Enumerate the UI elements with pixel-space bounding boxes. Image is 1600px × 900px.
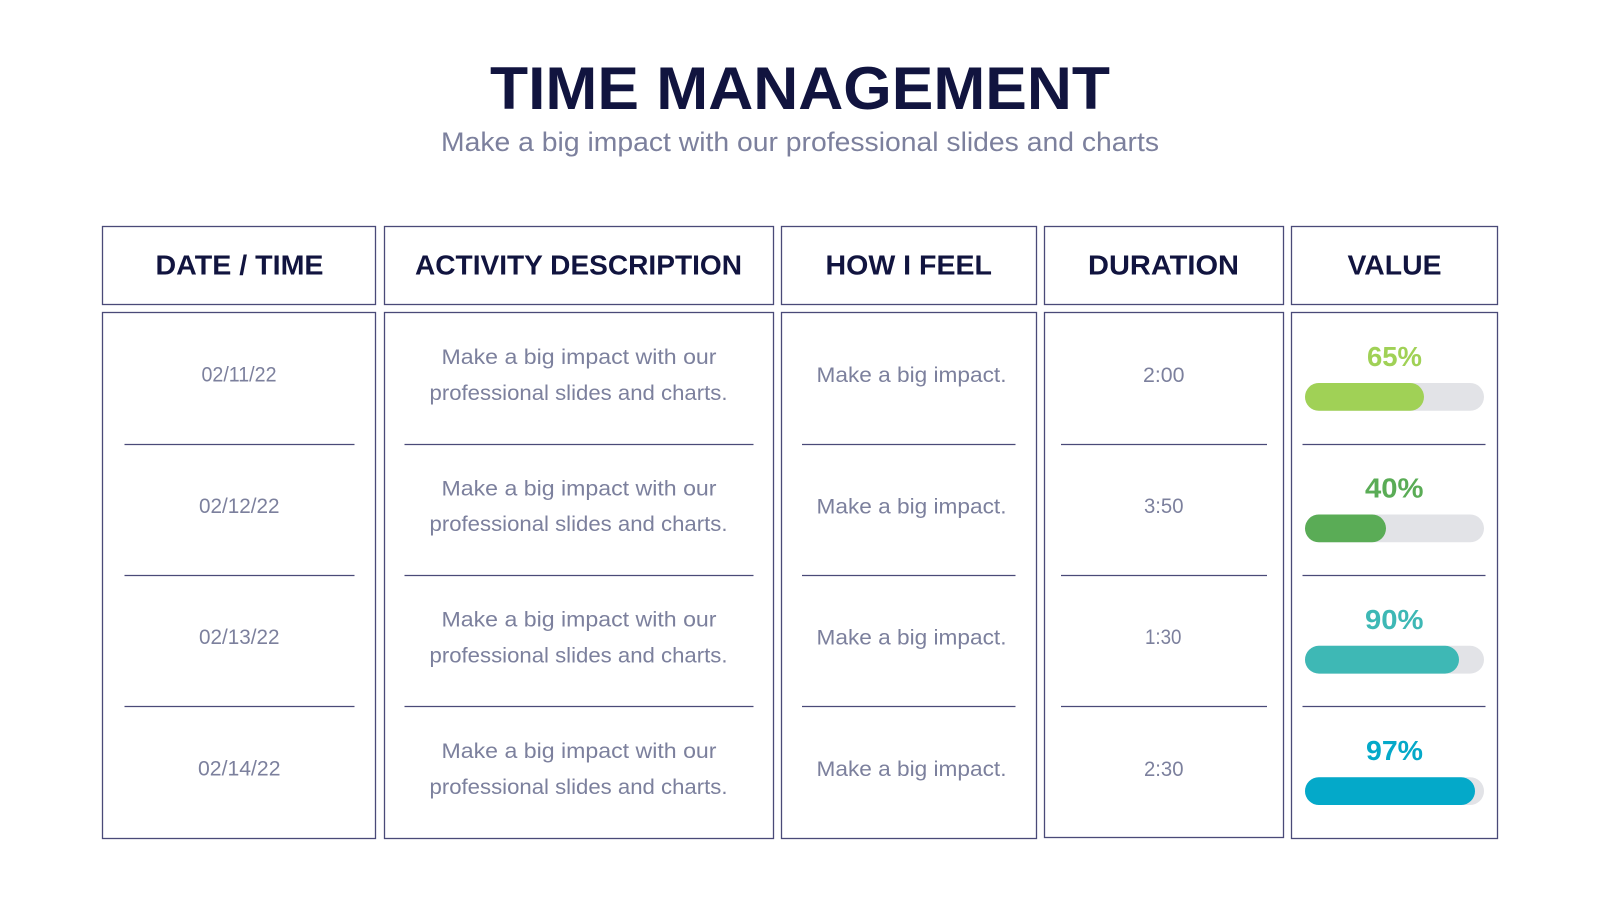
panel: dates: 02/12/22 [199,494,280,518]
column: duration [1044,226,1284,838]
panel: activities [384,312,774,838]
header: date / time [102,226,376,304]
panel: dates: 02/13/22 [199,625,280,649]
progress bar: 97%: 97% [1366,735,1423,766]
panel: activities: professional slides and charts. [430,512,728,536]
panel: durations [1044,312,1284,838]
progress bar: 40%: 40% [1365,472,1424,504]
panel: durations: 1:30 [1145,625,1182,649]
panel: activities: professional slides and charts. [430,381,728,405]
panel: dates [102,312,376,838]
header: how i feel [782,226,1036,304]
header: activity description: ACTIVITY DESCRIPTION [415,250,742,280]
panel: activities: Make a big impact with our [442,739,716,763]
subtitle: Make a big impact with our professional slides and charts [441,127,1159,157]
progress bar: 65% [1305,341,1484,411]
column: value [1292,226,1498,838]
panel: durations: 2:00 [1143,363,1185,387]
header: date / time: DATE / TIME [156,250,324,280]
progress bar: 40% [1305,472,1484,542]
column: date / time [102,226,376,838]
panel: activities: professional slides and charts. [430,644,728,668]
header: duration [1044,226,1284,304]
header: value [1292,226,1498,304]
panel: feelings [782,312,1036,838]
panel: feelings: Make a big impact. [816,757,1006,781]
panel: feelings: Make a big impact. [816,363,1006,387]
header: duration: DURATION [1088,250,1239,280]
panel: activities: Make a big impact with our [442,345,716,369]
progress bar: 90%: 90% [1365,604,1424,635]
panel: values [1292,312,1498,838]
panel: dates: 02/14/22 [198,756,280,780]
column: activity description [384,226,774,838]
title: TIME MANAGEMENT [490,55,1110,122]
panel: durations: 3:50 [1144,494,1184,518]
header: how i feel: HOW I FEEL [826,250,992,280]
panel: durations: 2:30 [1144,757,1184,781]
column: how i feel [782,226,1036,838]
panel: activities: Make a big impact with our [442,476,716,500]
panel: activities: Make a big impact with our [442,608,716,632]
progress bar: 65%: 65% [1367,341,1422,372]
panel: feelings: Make a big impact. [816,494,1006,518]
progress bar: 97% [1305,735,1484,805]
panel: activities: professional slides and charts. [430,775,728,799]
panel: dates: 02/11/22 [202,362,276,386]
progress bar: 90% [1305,604,1484,674]
header: value: VALUE [1348,250,1442,280]
header: activity description [384,226,774,304]
panel: feelings: Make a big impact. [816,626,1006,650]
